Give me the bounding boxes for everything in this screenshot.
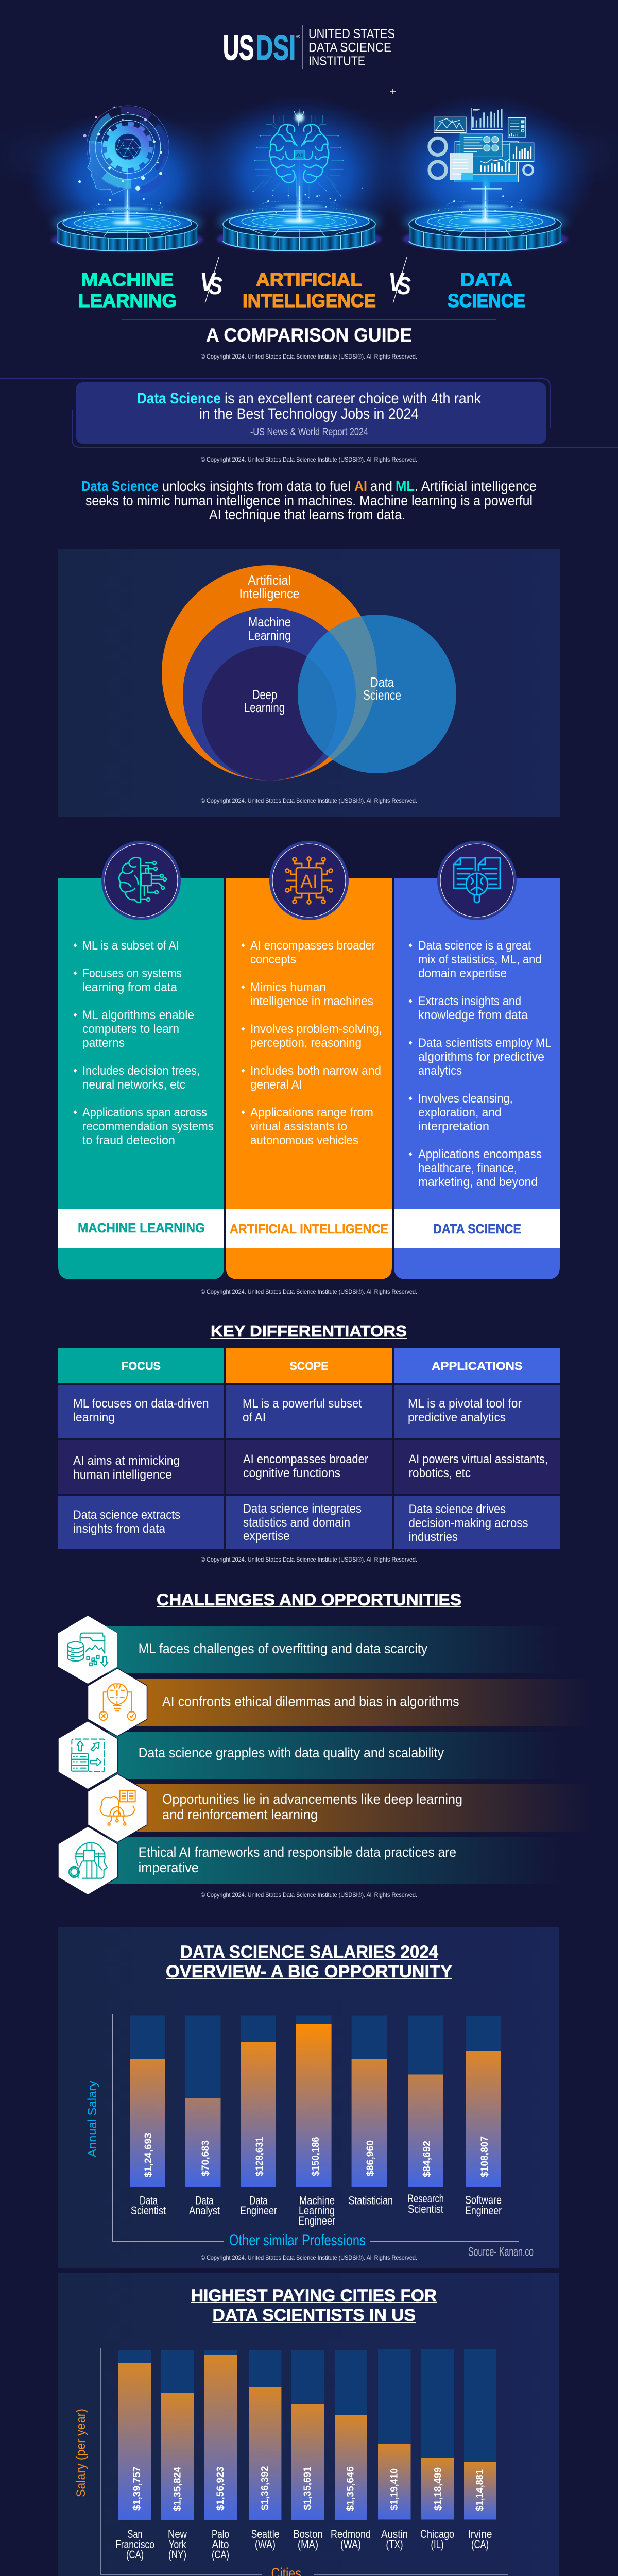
panel: data science column: [394, 878, 560, 1279]
table: key differentiators: [58, 1348, 560, 1549]
bar: chicago: Chicago: [420, 2528, 454, 2540]
subtitle: A COMPARISON GUIDE: [206, 325, 412, 346]
bar: statistician: Statistician: [348, 2194, 393, 2207]
bullets: Data scientists employ ML: [418, 1036, 552, 1050]
axis label: professions: Other similar Professions: [229, 2232, 366, 2249]
row: data science: statistics and domain: [243, 1516, 350, 1530]
icon: data science dashboard hologram: [430, 108, 534, 190]
platform: artificial intelligence: [217, 175, 382, 251]
bar: data engineer: Engineer: [240, 2204, 277, 2217]
copyright: © Copyright 2024. United States Data Science Institute (USDSI®). All Rights Reserved.: [201, 2254, 417, 2261]
row: data science: insights from data: [73, 1522, 166, 1536]
bar: statistician: [348, 2015, 393, 2207]
hexagon icon: cloud learning: [88, 1774, 147, 1842]
band: opportunities: Opportunities lie in advancements like deep learning: [162, 1791, 462, 1807]
heading: salaries: DATA SCIENCE SALARIES 2024: [180, 1942, 438, 1962]
row: machine learning: ML is a powerful subset: [243, 1397, 362, 1411]
header: scope: SCOPE: [289, 1360, 329, 1372]
header: focus: FOCUS: [122, 1360, 161, 1372]
bar: redmond: Redmond: [331, 2528, 371, 2540]
bullets: perception, reasoning: [250, 1036, 362, 1050]
bullets: to fraud detection: [82, 1133, 175, 1147]
row: data science: expertise: [243, 1529, 289, 1543]
bar: boston: Boston: [294, 2528, 322, 2540]
bullets: [241, 939, 382, 1147]
bullets: mix of statistics, ML, and: [418, 953, 542, 967]
bullets: learning from data: [82, 980, 178, 994]
bar: statistician: $86,960: [365, 2140, 376, 2176]
row: data science: Data science integrates: [243, 1502, 362, 1516]
bullets: analytics: [418, 1064, 462, 1078]
callout: career ranking: [0, 379, 618, 447]
heading: challenges and opportunities: CHALLENGES AND OPPORTUNITIES: [157, 1590, 461, 1609]
bar: boston: [291, 2350, 324, 2551]
bullets: [409, 939, 552, 1189]
venn labels: Deep: [252, 687, 277, 702]
bullets: Mimics human: [250, 980, 326, 994]
bar: boston: $1,35,691: [302, 2466, 313, 2510]
copyright: © Copyright 2024. United States Data Science Institute (USDSI®). All Rights Reserved.: [201, 353, 417, 360]
bar: irvine: $1,14,881: [475, 2469, 485, 2511]
column label: DATA SCIENCE: [433, 1221, 521, 1236]
bullets: intelligence in machines: [250, 994, 373, 1008]
bullets: knowledge from data: [418, 1008, 528, 1022]
panel: venn diagram: [58, 549, 560, 817]
venn: machine learning: [183, 608, 356, 781]
bar: san francisco: San: [128, 2528, 142, 2540]
panel: highest paying cities: [58, 2273, 559, 2576]
intro paragraph: seeks to mimic human intelligence in machines. Machine learning is a powerful: [85, 493, 533, 509]
bullets: Applications encompass: [418, 1147, 542, 1161]
bar: software engineer: Engineer: [465, 2204, 502, 2217]
bullets: Includes both narrow and: [250, 1064, 381, 1078]
row: data science: Data science drives: [409, 1502, 506, 1516]
row: machine learning: ML is a pivotal tool for: [408, 1397, 522, 1411]
callout: career ranking: -US News & World Report 2024: [250, 426, 368, 438]
row: data science: Data science extracts: [73, 1508, 180, 1522]
logo: INSTITUTE: [308, 54, 365, 69]
bullets: algorithms for predictive: [418, 1050, 544, 1064]
bullets: general AI: [250, 1078, 302, 1092]
bar: data scientist: Data: [140, 2194, 158, 2207]
bullets: patterns: [82, 1036, 125, 1050]
heading: artificial intelligence: [243, 269, 376, 311]
heading: data science: [448, 269, 525, 311]
bar: new york: [161, 2350, 194, 2561]
bullets: Includes decision trees,: [82, 1064, 200, 1078]
bar: palo alto: Alto: [212, 2538, 229, 2551]
bar: data analyst: Data: [196, 2194, 214, 2207]
logo: UNITED STATES: [308, 27, 395, 41]
bar: redmond: $1,35,646: [345, 2466, 356, 2511]
column label: MACHINE LEARNING: [78, 1220, 205, 1235]
heading: salaries: [166, 1942, 452, 1981]
bar: irvine: Irvine: [468, 2528, 492, 2540]
row: artificial intelligence: AI aims at mimicking: [73, 1454, 180, 1468]
bar: machine learning engineer: Learning: [299, 2204, 335, 2217]
bar: data scientist: Scientist: [131, 2204, 166, 2217]
hero glow background: [0, 95, 618, 255]
bullets: autonomous vehicles: [250, 1133, 358, 1147]
bar: palo alto: [204, 2350, 237, 2561]
band: opportunities: [135, 1784, 588, 1832]
row: artificial intelligence: AI powers virtual assistants,: [409, 1452, 548, 1466]
bar: software engineer: $108,807: [479, 2136, 490, 2177]
logo: DSI: [256, 28, 296, 67]
bar: new york: New: [168, 2528, 187, 2540]
bar: austin: Austin: [381, 2528, 408, 2540]
column label: ARTIFICIAL INTELLIGENCE: [230, 1221, 388, 1236]
bar: software engineer: Software: [465, 2194, 502, 2206]
icon: AI chip badge: [269, 841, 349, 920]
row: data science: industries: [409, 1530, 458, 1544]
intro paragraph: ML: [396, 478, 415, 494]
bar: machine learning engineer: Machine: [299, 2194, 335, 2207]
panel: data science salaries: [58, 1927, 559, 2268]
bar: data analyst: Analyst: [189, 2204, 220, 2217]
bullets: domain expertise: [418, 967, 507, 980]
bullets: ML is a subset of AI: [82, 939, 179, 953]
bar: palo alto: $1,56,923: [215, 2466, 226, 2511]
callout: career ranking: Data Science: [137, 390, 221, 407]
heading: cities: HIGHEST PAYING CITIES FOR: [191, 2286, 437, 2306]
icon: artificial intelligence brain hologram: AI: [296, 152, 303, 159]
copyright: © Copyright 2024. United States Data Science Institute (USDSI®). All Rights Reserved.: [201, 1288, 417, 1295]
bullets: Involves problem-solving,: [250, 1022, 382, 1036]
bar: redmond: [331, 2350, 371, 2551]
icon: brain and chip badge: [101, 841, 181, 920]
bullets: Data science is a great: [418, 939, 531, 953]
bullets: computers to learn: [82, 1022, 179, 1036]
heading: cities: DATA SCIENTISTS IN US: [212, 2306, 416, 2325]
band: overfitting: [106, 1626, 561, 1673]
heading: data science: DATA: [460, 269, 512, 290]
bar: austin: [378, 2349, 411, 2551]
bar: data engineer: Data: [249, 2194, 268, 2207]
bar: austin: $1,19,410: [389, 2468, 400, 2510]
panel: machine learning column: [58, 878, 224, 1279]
bar: new york: York: [169, 2538, 186, 2551]
bar: data analyst: [185, 2015, 220, 2217]
venn: deep learning: [202, 646, 337, 781]
vs badge 1: S: [209, 273, 222, 300]
bar: boston: (MA): [298, 2538, 318, 2551]
bar: chicago: $1,18,499: [433, 2467, 444, 2511]
hexagon icon: ethical brain: [88, 1668, 147, 1736]
bullets: Applications range from: [250, 1106, 373, 1120]
bar: seattle: (WA): [255, 2538, 276, 2551]
band: data quality: [106, 1732, 561, 1779]
logo: DATA SCIENCE: [308, 40, 391, 55]
band: responsible practices: Ethical AI frameworks and responsible data practices are: [139, 1844, 456, 1860]
bullets: [73, 939, 214, 1147]
row: artificial intelligence: human intelligence: [73, 1468, 172, 1482]
row: artificial intelligence: robotics, etc: [409, 1466, 471, 1480]
heading: key differentiators: KEY DIFFERENTIATORS: [211, 1322, 407, 1340]
header: applications: APPLICATIONS: [432, 1360, 523, 1372]
copyright: © Copyright 2024. United States Data Science Institute (USDSI®). All Rights Reserved.: [201, 1891, 417, 1899]
intro paragraph: unlocks insights from data to fuel: [162, 478, 351, 494]
heading: artificial intelligence: ARTIFICIAL: [256, 269, 362, 290]
bar: data engineer: $128,631: [254, 2137, 265, 2176]
callout: career ranking: in the Best Technology Jobs in 2024: [199, 405, 419, 422]
row: machine learning: learning: [73, 1411, 115, 1425]
bar: austin: (TX): [386, 2538, 403, 2551]
bar: san francisco: $1,39,757: [132, 2466, 143, 2511]
bar: research scientist: $84,692: [422, 2141, 433, 2177]
icon: artificial intelligence brain hologram: [252, 109, 363, 199]
row: data science: decision-making across: [409, 1516, 528, 1530]
logo: ®: [296, 34, 301, 40]
row: artificial intelligence: cognitive functions: [243, 1466, 340, 1480]
copyright: © Copyright 2024. United States Data Science Institute (USDSI®). All Rights Reserved.: [201, 456, 417, 463]
venn labels: [239, 572, 401, 715]
header: focus: [58, 1348, 224, 1383]
heading: machine learning: LEARNING: [78, 290, 177, 311]
bar: chicago: (IL): [431, 2538, 444, 2551]
bullets: exploration, and: [418, 1106, 502, 1120]
heading: cities: [191, 2286, 437, 2325]
venn labels: Science: [363, 687, 401, 703]
heading: artificial intelligence: INTELLIGENCE: [243, 290, 376, 311]
bar: software engineer: [465, 2016, 502, 2217]
bar: data analyst: $70,683: [200, 2140, 211, 2176]
intro paragraph: . Artificial intelligence: [415, 478, 537, 494]
heading: machine learning: [78, 269, 177, 311]
header: applications: [394, 1348, 560, 1383]
logo: [223, 25, 395, 69]
bullets: recommendation systems: [82, 1120, 214, 1133]
hexagon icon: scalability: [58, 1721, 117, 1789]
bullets: Involves cleansing,: [418, 1092, 513, 1106]
bar: machine learning engineer: $150,186: [311, 2137, 321, 2176]
hexagon icon: data scarcity: [58, 1616, 117, 1684]
venn: artificial intelligence: [162, 565, 377, 781]
heading: salaries: OVERVIEW- A BIG OPPORTUNITY: [166, 1962, 452, 1981]
bullets: Extracts insights and: [418, 994, 521, 1008]
bar: research scientist: Scientist: [408, 2202, 443, 2215]
bar: new york: (NY): [168, 2548, 186, 2561]
vs badge 2: S: [397, 273, 411, 300]
row: machine learning: [58, 1385, 560, 1438]
copyright: © Copyright 2024. United States Data Science Institute (USDSI®). All Rights Reserved.: [201, 1556, 417, 1563]
copyright: © Copyright 2024. United States Data Science Institute (USDSI®). All Rights Reserved.: [201, 797, 417, 804]
vs badge 2: [388, 257, 411, 303]
header: scope: [226, 1348, 392, 1383]
vs badge 1: [200, 257, 222, 303]
bar: san francisco: (CA): [126, 2548, 144, 2561]
bar: machine learning engineer: Engineer: [298, 2214, 335, 2227]
bullets: AI encompasses broader: [250, 939, 375, 953]
band: ethics: [135, 1679, 588, 1726]
bar: seattle: Seattle: [251, 2528, 279, 2540]
bar: chicago: [420, 2349, 454, 2551]
vs badge 2: V: [388, 267, 405, 297]
bar: palo alto: (CA): [212, 2548, 229, 2561]
venn labels: Intelligence: [239, 586, 300, 601]
row: artificial intelligence: AI encompasses broader: [243, 1452, 368, 1466]
row: machine learning: predictive analytics: [408, 1411, 506, 1425]
heading: machine learning: MACHINE: [81, 269, 174, 290]
bar: irvine: [464, 2349, 496, 2551]
band: data quality: Data science grapples with data quality and scalability: [139, 1745, 444, 1760]
bullets: virtual assistants to: [250, 1120, 347, 1133]
row: artificial intelligence: [58, 1440, 560, 1494]
venn labels: Artificial: [248, 572, 291, 588]
vs badge 1: V: [200, 267, 217, 297]
bar chart: cities: [74, 2348, 508, 2576]
band: opportunities: and reinforcement learning: [162, 1807, 318, 1822]
sparkle: [390, 89, 396, 94]
bullets: healthcare, finance,: [418, 1161, 517, 1175]
venn labels: Learning: [244, 700, 285, 715]
row: machine learning: ML focuses on data-driven: [73, 1397, 209, 1411]
venn labels: Machine: [248, 614, 291, 630]
band: overfitting: ML faces challenges of overfitting and data scarcity: [139, 1641, 427, 1656]
row: data science: [58, 1496, 560, 1549]
intro paragraph: [81, 478, 537, 522]
row: machine learning: of AI: [243, 1411, 266, 1425]
bar: data scientist: $1,24,693: [143, 2133, 154, 2177]
bar: new york: $1,35,824: [172, 2467, 183, 2511]
platform: machine learning: [52, 179, 203, 251]
bar: machine learning engineer: [296, 2015, 335, 2227]
bullets: ML algorithms enable: [82, 1008, 194, 1022]
intro paragraph: AI technique that learns from data.: [209, 506, 405, 522]
intro paragraph: Data Science: [81, 478, 159, 494]
bar: palo alto: Palo: [212, 2528, 229, 2540]
band: responsible practices: imperative: [139, 1860, 199, 1875]
bullets: concepts: [250, 953, 296, 967]
intro paragraph: AI: [354, 478, 367, 494]
source: Source- Kanan.co: [468, 2245, 534, 2259]
band: ethics: AI confronts ethical dilemmas and bias in algorithms: [162, 1694, 459, 1709]
bar: san francisco: [115, 2350, 154, 2561]
bar: data engineer: [240, 2015, 277, 2217]
panel: artificial intelligence column: [226, 878, 392, 1279]
bullets: interpretation: [418, 1120, 489, 1133]
challenge rows: [58, 1616, 588, 1895]
bullets: Applications span across: [82, 1106, 207, 1120]
bar: irvine: (CA): [471, 2538, 489, 2551]
bullets: Focuses on systems: [82, 967, 182, 980]
platform: data science: [403, 175, 568, 251]
bar: redmond: (WA): [340, 2538, 361, 2551]
axis label: annual salary: Annual Salary: [85, 2081, 99, 2157]
callout: career ranking: is an excellent career choice with 4th rank: [225, 390, 482, 407]
bar: research scientist: Research: [407, 2192, 444, 2205]
icon: documents and magnified brain badge: [437, 841, 517, 920]
intro paragraph: and: [370, 478, 392, 494]
icon: machine learning head and gear hologram: [78, 106, 169, 201]
venn labels: Data: [370, 674, 394, 690]
bullets: neural networks, etc: [82, 1078, 185, 1092]
bar: seattle: $1,36,392: [260, 2466, 271, 2510]
icon: AI chip badge: AI: [300, 871, 318, 893]
bullets: marketing, and beyond: [418, 1175, 538, 1189]
bar: san francisco: Francisco: [115, 2538, 154, 2551]
venn labels: Learning: [248, 628, 291, 643]
heading: data science: SCIENCE: [448, 290, 525, 311]
band: responsible practices: [106, 1837, 561, 1884]
bar: data scientist: [130, 2015, 166, 2217]
bar: research scientist: [407, 2015, 444, 2215]
hexagon icon: ethical AI head: [58, 1826, 117, 1895]
bar: seattle: [249, 2350, 281, 2551]
logo: US: [223, 28, 254, 67]
axis label: salary: Salary (per year): [74, 2409, 88, 2497]
venn: data science: [298, 615, 456, 773]
bar chart: salaries: [85, 2014, 519, 2249]
